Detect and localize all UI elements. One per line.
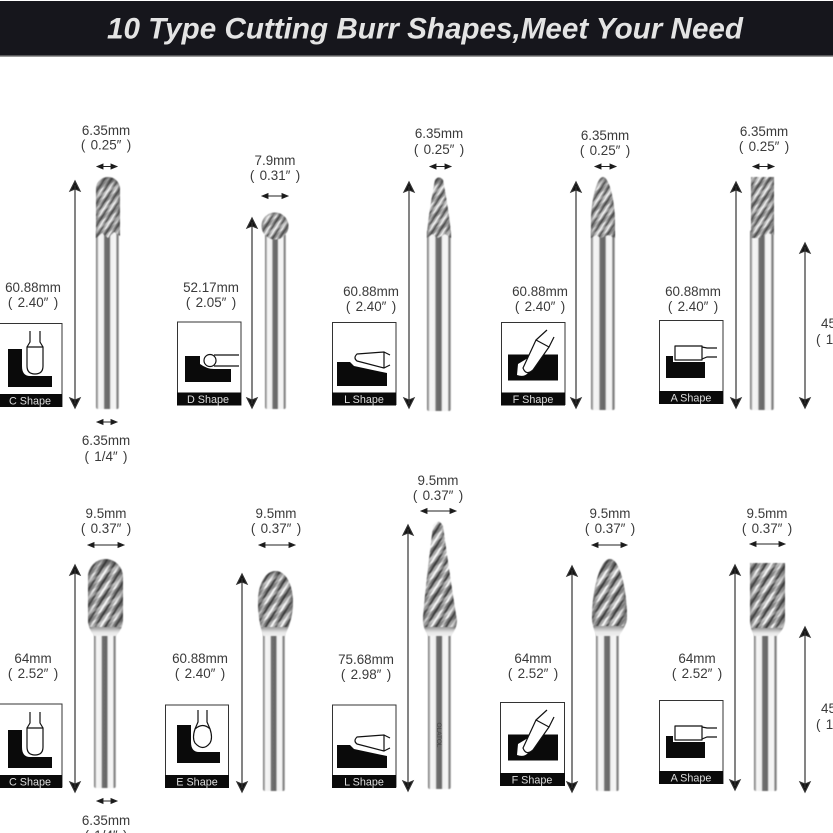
length arrow [247,218,257,408]
shank [754,630,777,791]
width label: 9.5mm [590,506,630,521]
shape icon [332,705,396,788]
length label: 60.88mm [665,284,721,299]
length arrow [70,565,80,792]
width arrow [262,194,288,198]
shape icon [165,705,229,788]
length arrow [571,182,581,408]
shank [263,630,285,791]
shape icon [501,322,565,406]
shank [750,230,774,410]
width label: 9.5mm [747,506,787,521]
shape icon: A Shape [671,772,711,784]
length label: ( 2.52″ ) [8,666,58,681]
shape icon [659,700,723,784]
length label: 64mm [678,651,716,666]
burr: C shape large [0,506,131,833]
cutting head [95,176,121,238]
shape icon [0,324,62,408]
shank [94,630,116,788]
title: 10 Type Cutting Burr Shapes,Meet Your Need [107,12,744,46]
length label: ( 2.40″ ) [8,295,58,310]
length arrow [731,182,741,408]
width arrow [753,164,774,169]
shape icon: C Shape [9,776,51,788]
cutting head [257,570,294,637]
burr: A shape small [659,124,789,410]
shape icon [177,322,241,406]
width arrow [88,542,124,548]
width label: 6.35mm [740,124,788,139]
shank [96,230,119,409]
length label: 75.68mm [338,652,394,667]
burr: F shape small [501,128,630,410]
length label: 60.88mm [5,280,61,295]
width arrow [259,542,295,548]
width label: ( 0.37″ ) [742,521,792,536]
shape icon: F Shape [513,394,553,406]
cutting head [422,521,458,637]
shank [427,230,451,411]
shape icon [0,704,62,788]
cutting head [590,176,616,238]
width label: ( 0.25″ ) [580,143,630,158]
width label: ( 0.31″ ) [250,168,300,183]
length label: 60.88mm [512,284,568,299]
shape icon: L Shape [344,394,384,406]
shank arrow [97,420,117,424]
title banner [0,1,833,57]
bottom diameter text: ( 1/4″ ) [85,449,127,464]
width label: 7.9mm [255,153,295,168]
shank [591,230,615,410]
length label: ( 2.40″ ) [346,299,396,314]
burr: E shape [165,506,301,792]
length arrow [730,565,740,790]
shape icon: F Shape [512,774,552,786]
width label: 6.35mm [415,126,463,141]
burr: F shape large [500,506,635,792]
side dimension: bottom right [800,627,833,792]
side dimension: top right [800,243,833,408]
burr: A shape large [659,506,792,791]
length label: 60.88mm [343,284,399,299]
width label: ( 0.25″ ) [739,139,789,154]
bottom diameter text: 6.35mm [82,433,130,448]
shape icon [659,320,723,404]
length label: ( 2.40″ ) [175,666,225,681]
width arrow [595,164,616,169]
burr: C shape small [0,123,131,464]
shape icon: C Shape [9,396,51,408]
width arrow [592,542,627,548]
shape icon: A Shape [671,392,711,404]
cutting head [590,557,630,638]
length label: ( 2.40″ ) [668,299,718,314]
shape icon: D Shape [187,394,229,406]
burr: L shape small [332,126,464,411]
brand mark: OLATOL [435,722,442,748]
length arrow [800,627,810,792]
cutting head [750,176,775,239]
width arrow [430,164,451,169]
length arrow [800,243,810,408]
cutting head [426,176,452,238]
width label: ( 0.25″ ) [81,138,131,152]
length arrow [567,566,577,792]
width label: ( 0.37″ ) [413,488,463,503]
cutting head [260,211,290,241]
width label: 9.5mm [418,473,458,488]
length arrow [70,181,80,408]
length label: 64mm [14,651,52,666]
cutting head [748,561,788,638]
shape icon: L Shape [344,776,384,788]
width label: 6.35mm [581,128,629,143]
width label: ( 0.37″ ) [585,521,635,536]
shank [596,630,619,791]
width label: ( 0.37″ ) [251,521,301,536]
width label: 9.5mm [86,506,126,521]
shank arrow [97,798,117,804]
shape icon [500,702,565,786]
width arrow [421,508,456,514]
length label: 64mm [514,651,552,666]
shape icon: E Shape [176,776,218,788]
width arrow [97,164,117,169]
length label: ( 2.98″ ) [341,667,391,682]
length label: 52.17mm [183,280,239,295]
bottom diameter text: 6.35mm [82,813,130,828]
length arrow [237,574,247,792]
length label: 60.88mm [172,651,228,666]
cutting head [87,558,124,637]
width label: 9.5mm [256,506,296,521]
shank [428,630,451,789]
shape icon [332,322,396,406]
length label: ( 2.40″ ) [515,299,565,314]
burr: D shape [177,153,300,409]
shank [265,234,286,409]
length label: ( 2.52″ ) [672,666,722,681]
burr: L shape large [332,473,463,791]
width label: ( 0.37″ ) [81,521,131,536]
width label: 6.35mm [82,123,130,138]
length arrow [403,525,413,791]
length label: ( 2.05″ ) [186,295,236,310]
length label: ( 2.52″ ) [508,666,558,681]
length arrow [404,182,414,408]
width label: ( 0.25″ ) [414,142,464,157]
width arrow [750,542,785,546]
